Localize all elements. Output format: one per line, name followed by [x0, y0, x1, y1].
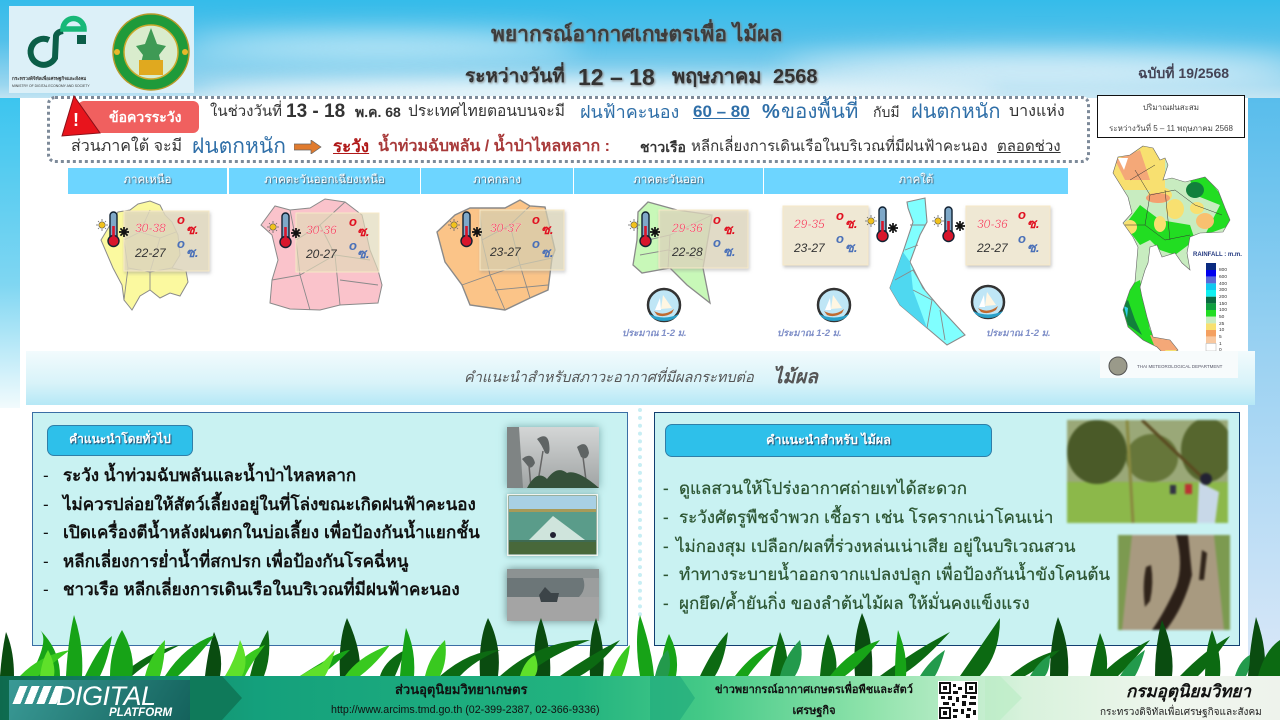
fruit tree advice heading	[665, 424, 992, 457]
fruit tree advice list: -	[663, 537, 669, 556]
date range subtitle: ระหว่างวันที่	[465, 66, 565, 87]
south east temperature box: ซ.	[1027, 240, 1039, 255]
map: northeast: ซ.	[357, 224, 369, 239]
sky header background	[0, 0, 1280, 100]
region header: north: ภาคเหนือ	[123, 174, 172, 186]
alert text line 1: ประเทศไทยตอนบนจะมี	[408, 103, 565, 120]
footer bar	[0, 676, 1280, 720]
map: north: 22-27	[134, 246, 167, 260]
digital wordmark: DIGITAL	[56, 681, 156, 711]
general advice list: -	[43, 552, 49, 571]
rainfall caption box: ระหว่างวันที่ 5 – 11 พฤษภาคม 2568	[1109, 124, 1233, 133]
region header: central	[421, 168, 573, 194]
icon: meteorological department seal	[113, 14, 189, 90]
right side strip	[1248, 98, 1280, 678]
map: northeast: 30-36	[306, 223, 337, 237]
rainfall legend: 300	[1219, 287, 1227, 293]
alert text line 2: ระวัง	[333, 137, 369, 156]
map: northeast: o	[349, 238, 357, 253]
rainfall legend: RAINFALL : m.m.	[1193, 252, 1242, 258]
advice heading	[464, 366, 818, 388]
rainfall legend: 10	[1219, 327, 1225, 333]
main white panel	[20, 98, 1248, 350]
chevron decorations	[190, 676, 1022, 720]
general advice list: -	[43, 580, 49, 599]
alert text line 1: บางแห่ง	[1009, 103, 1065, 120]
panel: fruit tree advice	[654, 412, 1240, 646]
rainfall map of Thailand	[1112, 146, 1242, 351]
general advice list: ไม่ควรปล่อยให้สัตว์เลี้ยงอยู่ในที่โล่งขณะเกิดฝนฟ้าคะนอง	[63, 495, 476, 514]
general advice heading	[47, 425, 193, 456]
map: central: o	[532, 236, 540, 251]
dotted divider	[638, 408, 642, 648]
fruit tree advice list: ไม่กองสุม เปลือก/ผลที่ร่วงหล่นเน่าเสีย อยู่ในบริเวณสวน	[676, 537, 1075, 556]
alert text line 1: ฝนตกหนัก	[911, 101, 1000, 123]
alert text line 2: ส่วนภาคใต้ จะมี	[71, 138, 182, 155]
fruit tree advice list	[663, 478, 1110, 614]
photo: storm palms	[507, 427, 599, 488]
general advice list: ระวัง น้ำท่วมฉับพลันและน้ำป่าไหลหลาก	[63, 466, 356, 485]
region header: south	[764, 168, 1068, 194]
map: central: 23-27	[489, 245, 522, 259]
map: northeast: 20-27	[305, 247, 338, 261]
fruit tree advice list: ทำทางระบายน้ำออกจากแปลงปลูก เพื่อป้องกันน้ำขังโคนต้น	[679, 565, 1110, 584]
map: northeast	[261, 199, 382, 310]
icon: ministry logo	[12, 18, 90, 88]
advice heading: คำแนะนำสำหรับสภาวะอากาศที่มีผลกระทบต่อ	[464, 370, 754, 386]
alert text line 2: น้ำท่วมฉับพลัน / น้ำป่าไหลหลาก :	[378, 138, 610, 155]
photo: pond aerator	[507, 494, 598, 556]
qr code	[938, 681, 978, 720]
contact url: http://www.arcims.tmd.go.th (02-399-2387, 02-366-9336)	[331, 704, 600, 716]
south east temperature box: o	[1018, 207, 1026, 222]
alert text line 2	[71, 134, 1061, 158]
photo: tree trunk rot	[1116, 533, 1232, 632]
map: east: ซ.	[723, 222, 735, 237]
rainfall legend: 150	[1219, 301, 1227, 307]
fruit tree advice list: -	[663, 479, 669, 498]
map: east: ประมาณ 1-2 ม.	[622, 328, 687, 339]
rainfall legend: 600	[1219, 274, 1227, 280]
map: east	[622, 202, 748, 339]
bulletin title: เศรษฐกิจ	[792, 705, 836, 717]
rainfall legend	[1193, 252, 1242, 353]
alert text line 2: ชาวเรือ	[640, 139, 686, 155]
general advice list: -	[43, 466, 49, 485]
date range subtitle: พฤษภาคม	[672, 66, 761, 88]
rainfall caption box: ปริมาณฝนสะสม	[1143, 103, 1199, 112]
general advice list: -	[43, 495, 49, 514]
region header: northeast: ภาคตะวันออกเฉียงเหนือ	[264, 174, 385, 186]
map: northeast: o	[349, 214, 357, 229]
general advice list	[43, 462, 480, 599]
map: north	[96, 201, 209, 310]
advice heading: ไม้ผล	[773, 367, 818, 388]
region header: east: ภาคตะวันออก	[633, 174, 704, 186]
map credit strip	[1100, 351, 1238, 378]
alert text line 1: 13 - 18	[286, 101, 345, 122]
left side strip	[0, 98, 20, 408]
alert badge	[61, 95, 199, 136]
panel: general advice	[32, 412, 628, 646]
alert box	[47, 96, 1090, 163]
south east temperature box: 30-36	[977, 217, 1008, 231]
map: northeast: ซ.	[357, 246, 369, 261]
fruit tree advice list: ระวังศัตรูพืชจำพวก เชื้อรา เช่น โรครากเน่าโคนเน่า	[679, 508, 1053, 527]
alert text line 1	[210, 96, 1065, 123]
fruit tree advice heading: คำแนะนำสำหรับ ไม้ผล	[766, 433, 891, 447]
south west temperature box: ประมาณ 1-2 ม.	[777, 328, 842, 339]
south east temperature box: 22-27	[976, 241, 1009, 255]
south west temperature box: ซ.	[845, 240, 857, 255]
map: south	[777, 198, 1051, 345]
map: north: 30-38	[135, 221, 166, 235]
regional forecast maps	[96, 146, 1242, 353]
date range subtitle: 2568	[773, 66, 818, 88]
map: central: ซ.	[541, 222, 553, 237]
alert text line 1: ในช่วงวันที่	[210, 103, 282, 120]
map: east: ซ.	[723, 244, 735, 259]
map credit strip: THAI METEOROLOGICAL DEPARTMENT	[1137, 364, 1223, 369]
icon: ministry logo: MINISTRY OF DIGITAL ECONOMY AND SOCIETY	[12, 84, 90, 88]
fruit tree advice list: -	[663, 594, 669, 613]
map: east: o	[713, 235, 721, 250]
region header: northeast	[229, 168, 420, 194]
date range subtitle	[465, 62, 820, 90]
general advice heading: คำแนะนำโดยทั่วไป	[69, 432, 171, 446]
map: east: 29-36	[671, 221, 703, 235]
rainfall legend: 200	[1219, 294, 1227, 300]
general advice list: เปิดเครื่องตีน้ำหลังฝนตกในบ่อเลี้ยง เพื่อป้องกันน้ำแยกชั้น	[63, 523, 480, 542]
alert text line 1: ของพื้นที่	[781, 100, 858, 123]
region header: south: ภาคใต้	[899, 174, 933, 186]
photo: orchard pruning	[1065, 418, 1230, 525]
digital platform logo	[9, 680, 190, 720]
region header: central: ภาคกลาง	[473, 174, 521, 186]
alert text line 2: หลีกเลี่ยงการเดินเรือในบริเวณที่มีฝนฟ้าคะนอง	[691, 138, 988, 155]
ministry name: กระทรวงดิจิทัลเพื่อเศรษฐกิจและสังคม	[1100, 707, 1262, 718]
alert text line 1: 60 – 80	[693, 102, 750, 121]
rainfall legend: 5	[1219, 334, 1222, 340]
south west temperature box: 23-27	[793, 241, 826, 255]
map: central	[437, 200, 564, 310]
grass	[0, 613, 1280, 676]
fruit tree advice list: ดูแลสวนให้โปร่งอากาศถ่ายเทได้สะดวก	[679, 479, 967, 498]
south west temperature box: ซ.	[845, 216, 857, 231]
rainfall legend: 100	[1219, 307, 1227, 313]
rainfall legend: 1	[1219, 341, 1222, 347]
icon: ministry logo: กระทรวงดิจิทัลเพื่อเศรษฐกิจและสังคม	[12, 75, 86, 82]
rainfall legend: 0	[1219, 347, 1222, 353]
south west temperature box: o	[836, 208, 844, 223]
photo: fishing boat in haze	[507, 569, 599, 621]
general advice list: หลีกเลี่ยงการย่ำน้ำที่สกปรก เพื่อป้องกันโรคฉี่หนู	[63, 552, 408, 571]
alert badge: ข้อควรระวัง	[109, 109, 181, 125]
south east temperature box: o	[1018, 231, 1026, 246]
alert text line 2: ตลอดช่วง	[997, 138, 1061, 155]
advice band	[26, 351, 1255, 405]
map: east: o	[713, 212, 721, 227]
rainfall legend: 25	[1219, 321, 1225, 327]
general advice list: ชาวเรือ หลีกเลี่ยงการเดินเรือในบริเวณที่มีฝนฟ้าคะนอง	[63, 580, 460, 599]
title: พยากรณ์อากาศเกษตรเพื่อ ไม้ผล	[491, 23, 782, 46]
region header: east	[574, 168, 763, 194]
department name: กรมอุตุนิยมวิทยา	[1126, 682, 1251, 701]
south west temperature box: 29-35	[793, 217, 825, 231]
bulletin title: ข่าวพยากรณ์อากาศเกษตรเพื่อพืชและสัตว์	[715, 684, 913, 696]
region header: north	[68, 168, 227, 194]
fruit tree advice list: -	[663, 565, 669, 584]
rainfall legend: 800	[1219, 267, 1227, 273]
alert text line 1: %	[762, 101, 780, 123]
map: north: ซ.	[186, 245, 198, 260]
map: central: o	[532, 212, 540, 227]
logo panel	[9, 6, 194, 93]
alert text line 1: กับมี	[873, 104, 900, 120]
issue number: ฉบับที่ 19/2568	[1138, 65, 1229, 81]
south west temperature box	[777, 206, 898, 339]
fruit tree advice list: ผูกยึด/ค้ำยันกิ่ง ของลำต้นไม้ผล ให้มั่นคงแข็งแรง	[679, 594, 1030, 613]
map: central: ซ.	[541, 245, 553, 260]
map: east: 22-28	[671, 245, 703, 259]
alert badge: !	[73, 110, 79, 130]
bulletin title	[715, 681, 913, 718]
date range subtitle: 12 – 18	[578, 64, 655, 90]
alert text line 2: ฝนตกหนัก	[192, 135, 286, 158]
map: north: o	[177, 212, 185, 227]
map: central: 30-37	[490, 221, 522, 235]
general advice list: -	[43, 523, 49, 542]
agro meteorology division: ส่วนอุตุนิยมวิทยาเกษตร	[395, 682, 528, 697]
south east temperature box: ซ.	[1027, 216, 1039, 231]
rainfall legend: 400	[1219, 281, 1227, 287]
map: north: ซ.	[186, 222, 198, 237]
fruit tree advice list: -	[663, 508, 669, 527]
rainfall caption box	[1097, 95, 1245, 138]
alert text line 1: ฝนฟ้าคะนอง	[580, 102, 679, 122]
south west temperature box: o	[836, 231, 844, 246]
south east temperature box	[932, 206, 1051, 339]
map: north: o	[177, 236, 185, 251]
platform wordmark: PLATFORM	[109, 707, 172, 719]
alert text line 1: พ.ค. 68	[355, 104, 401, 120]
rainfall legend: 50	[1219, 314, 1225, 320]
south east temperature box: ประมาณ 1-2 ม.	[986, 328, 1051, 339]
